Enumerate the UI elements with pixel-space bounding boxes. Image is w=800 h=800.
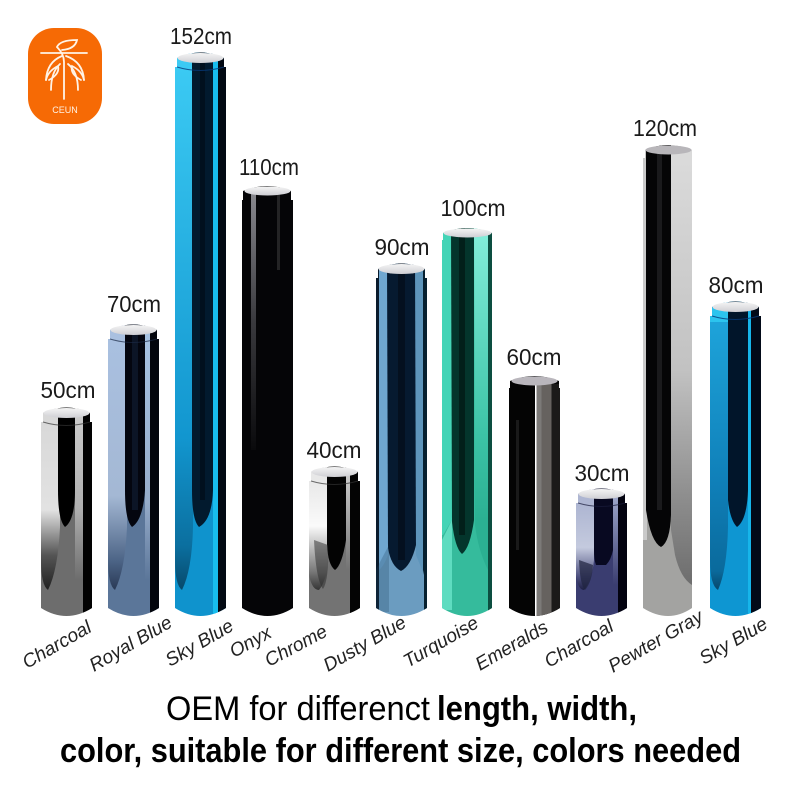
colour name labels xyxy=(19,606,771,677)
length labels: 80cm xyxy=(708,272,764,298)
colour name labels: Charcoal xyxy=(541,616,618,672)
colour name labels: Sky Blue xyxy=(162,616,237,671)
length labels: 110cm xyxy=(239,154,299,180)
roll: Charcoal 50cm xyxy=(41,400,92,620)
colour name labels: Pewter Gray xyxy=(605,606,708,677)
length labels: 120cm xyxy=(633,115,697,141)
roll: Sky Blue 80cm xyxy=(710,300,761,620)
length labels: 40cm xyxy=(306,437,362,463)
colour name labels: Sky Blue xyxy=(696,614,771,669)
length labels: 100cm xyxy=(440,195,506,221)
roll: Sky Blue 152cm xyxy=(175,50,226,620)
colour name labels: Emeralds xyxy=(472,617,552,675)
bottom caption: color, suitable for different size, colors needed xyxy=(60,732,741,770)
roll: Dusty Blue 90cm xyxy=(376,260,427,620)
logo: CEUN orange badge xyxy=(28,28,102,124)
colour name labels: Chrome xyxy=(261,621,331,671)
roll: Charcoal 30cm xyxy=(576,485,627,620)
roll: Emeralds 60cm xyxy=(509,370,560,620)
colour name labels: Charcoal xyxy=(19,617,96,673)
colour name labels: Onyx xyxy=(226,622,277,662)
roll: Onyx 110cm xyxy=(242,180,293,620)
roll: Royal Blue 70cm xyxy=(108,320,159,620)
bottom caption: length, width, xyxy=(437,690,637,728)
length labels: 70cm xyxy=(107,291,161,317)
roll: Chrome 40cm xyxy=(309,460,360,620)
logo: CEUN orange badge: CEUN xyxy=(52,105,78,115)
colour name labels: Dusty Blue xyxy=(320,612,410,676)
length labels xyxy=(40,23,764,486)
bottom caption: OEM for differenct xyxy=(166,690,431,728)
length labels: 50cm xyxy=(40,377,96,403)
length labels: 30cm xyxy=(574,460,630,486)
length labels: 152cm xyxy=(170,23,232,49)
colour name labels: Turquoise xyxy=(400,613,482,672)
bottom caption xyxy=(60,690,741,770)
roll: Pewter Gray 120cm xyxy=(643,140,694,620)
roll: Turquoise 100cm xyxy=(442,225,493,620)
length labels: 90cm xyxy=(374,234,430,260)
length labels: 60cm xyxy=(506,344,562,370)
colour name labels: Royal Blue xyxy=(86,612,176,676)
